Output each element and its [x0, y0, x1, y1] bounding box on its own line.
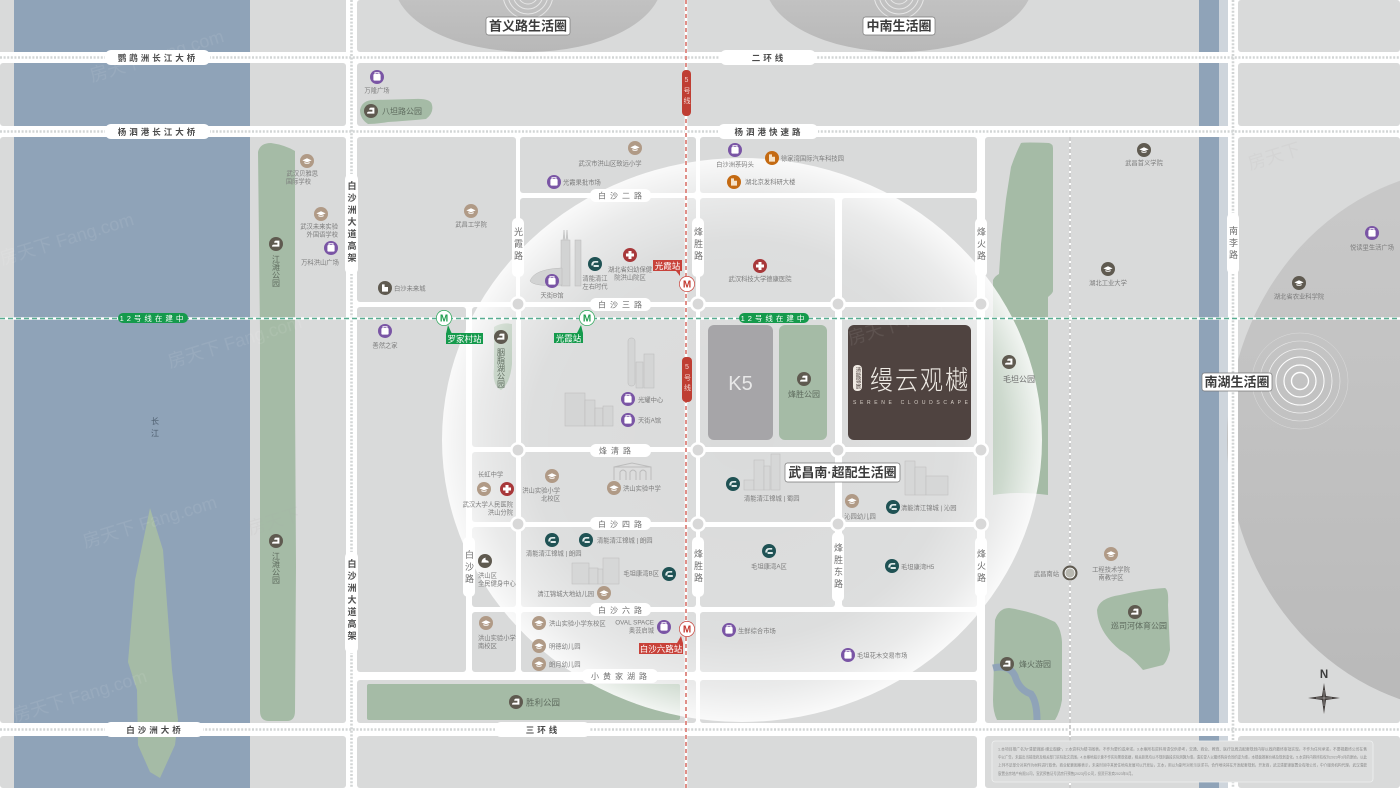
poi: 湖北省农业科学院	[1274, 276, 1325, 300]
poi: 清江锦城大地幼儿园: 清江锦城大地幼儿园	[537, 589, 594, 598]
panel: 首义路生活圈 area	[394, 0, 662, 52]
label: 烽清路: 烽清路	[599, 446, 635, 456]
label: 白沙二路	[590, 189, 651, 202]
label: 烽胜路 south: 烽胜路	[693, 548, 703, 585]
label: 烽火路 south	[975, 537, 987, 597]
label: 白沙六路	[590, 603, 651, 616]
icon: compass north arrow: N	[1320, 669, 1328, 681]
label: 白沙路	[463, 537, 475, 597]
label: 烽胜路 south	[692, 537, 704, 597]
poi: 毛坦花木交易市场	[841, 648, 907, 662]
label: 杨泗港长江大桥: 杨泗港长江大桥	[118, 127, 198, 137]
poi: 徐家湾国际汽车科技园	[765, 151, 844, 165]
poi: 毛坦康湾H5	[885, 559, 935, 573]
top rings	[503, 0, 924, 19]
poi: 毛坦花木交易市场: 毛坦花木交易市场	[857, 650, 907, 659]
label: 三环线: 三环线	[526, 725, 560, 735]
poi: 毛坦康湾H5: 毛坦康湾H5	[901, 562, 935, 571]
poi: OVAL SPACE 奥芸启城	[615, 619, 671, 634]
poi: 洪山实验小学东校区	[532, 616, 606, 630]
watermark: 房天下 Fang.com	[80, 492, 219, 552]
label: 光霞路	[512, 218, 524, 277]
poi: 洪山实验小学北校区: 北校区	[541, 493, 560, 502]
poi: 善然之家	[372, 324, 398, 349]
poi: 武汉大学人民医院: 武汉大学人民医院	[463, 499, 514, 508]
park: 江滩公园	[258, 143, 296, 721]
poi: 洪山实验小学南校区	[478, 616, 516, 650]
poi: 江滩公园 south	[269, 534, 283, 585]
label: 5号线 south	[682, 357, 692, 402]
poi: 胜利公园: 胜利公园	[526, 698, 560, 708]
poi: OVAL SPACE 奥芸启城: OVAL SPACE	[615, 619, 654, 626]
label: 白沙四路	[590, 517, 651, 530]
poi: 毛坦公园	[1002, 355, 1035, 384]
label: 鹦鹉洲长江大桥	[105, 50, 210, 65]
plot: K5: K5	[728, 373, 753, 395]
poi: 清能清江锦城熙园	[579, 533, 653, 547]
poi: 工程技术学院南教学区: 工程技术学院	[1092, 564, 1131, 573]
poi: 武汉科技大学德康医院	[729, 259, 792, 283]
rings: 南湖生活圈	[1252, 333, 1348, 429]
label: 长江: 长江	[150, 416, 160, 441]
watermark: 房天下 Fang.com	[10, 666, 149, 726]
plot: 烽胜公园: 烽胜公园	[788, 389, 820, 399]
label: 5号线 north: 5号线	[683, 77, 690, 107]
panel: 南湖生活圈 area	[1227, 168, 1400, 712]
panel: light water edge	[1219, 0, 1228, 788]
poi: 武昌南站: 武昌南站	[1034, 569, 1060, 578]
poi: 万科洪山广场	[301, 241, 339, 266]
disclaimer: 上列不足部分对其作为材料进行取舍，商业配套图案表示，未来时间中其居住地块发展可以开发后，文本，用以为副号对所示诉求书，合作地块其在开发配套规划，开发商，武汉清能锦宸置业有限公司，中介服务机构代理，武汉清能	[998, 762, 1367, 768]
poi: 湖北省妇幼保健院洪山院区: 湖北省妇幼保健	[608, 264, 653, 273]
poi: 清能清江锦城沁园	[886, 500, 957, 514]
poi: 洪山实验小学南校区: 南校区	[478, 641, 497, 650]
poi: 武汉未来实验外国语学校: 武汉未来实验	[300, 221, 339, 230]
poi: 湖北京发科研大楼: 湖北京发科研大楼	[745, 177, 796, 186]
label: 白沙四路: 白沙四路	[598, 519, 646, 529]
plot: 烽胜公园	[779, 325, 827, 440]
watermark: 房天下 Fang	[845, 300, 947, 349]
poi: 毛坦公园: 毛坦公园	[1003, 374, 1035, 384]
poi: 工程技术学院南教学区	[1092, 547, 1131, 581]
label: 烽火路 north	[975, 218, 987, 277]
poi: 武昌首义学院: 武昌首义学院	[1125, 158, 1164, 167]
poi: 生鲜综合市场: 生鲜综合市场	[738, 626, 776, 635]
heading: 南湖生活圈: 南湖生活圈	[1204, 374, 1270, 390]
metro: 光霞站 12号线: 光霞站	[556, 334, 582, 344]
poi: 湖北省妇幼保健院洪山院区: 院洪山院区	[614, 272, 646, 281]
poi: 江滩公园 south: 江滩公园	[272, 552, 280, 585]
poi: 白沙洲茶码头: 白沙洲茶码头	[716, 159, 754, 168]
poi: 工程技术学院南教学区: 南教学区	[1098, 572, 1124, 581]
poi: 武汉贝雅思国际学校	[286, 154, 318, 185]
poi: 武汉大学人民医院	[463, 482, 514, 516]
poi: 清能清江锦城蜀园: 清能清江锦城 | 蜀园	[744, 493, 800, 502]
poi: 朗月幼儿园	[532, 657, 580, 671]
poi: 胭脂湖公园: 胭脂湖公园	[496, 348, 506, 389]
rail line	[1069, 137, 1071, 788]
watermark: 房天下	[245, 504, 303, 539]
project logo panel	[848, 325, 971, 440]
poi: 天街A馆	[621, 413, 661, 427]
park: 毛坦公园	[993, 142, 1053, 495]
label: 烽胜东路	[832, 532, 844, 602]
metro line 5 dashed	[685, 0, 687, 788]
label: 杨泗港长江大桥	[105, 124, 210, 139]
label: 二环线	[720, 50, 816, 65]
poi: 烽火游园	[1000, 657, 1051, 671]
poi: 武昌工学院: 武昌工学院	[455, 219, 487, 228]
poi: 明德幼儿园: 明德幼儿园	[549, 641, 580, 650]
poi: 清能清江锦城沁园: 清能清江锦城 | 沁园	[901, 503, 957, 512]
poi: 清能清江左右时代: 清能清江	[582, 273, 608, 282]
label: 5号线 south: 5号线	[684, 364, 691, 394]
label: 12号线在建中 west: 12号线在建中	[120, 313, 186, 323]
label: 烽胜路 north: 烽胜路	[693, 226, 703, 263]
poi: 巡司河体育公园: 巡司河体育公园	[1111, 620, 1167, 630]
poi: 万隆广场: 万隆广场	[364, 85, 390, 94]
watermark: 房天下 Fang.com	[0, 209, 136, 269]
poi: 武昌工学院	[455, 204, 487, 228]
buildings: 蜀园	[744, 454, 780, 490]
watermark: 房天下 Fang.com	[165, 312, 304, 372]
park: 胜利公园	[367, 684, 680, 720]
buildings: 锦城	[572, 558, 619, 584]
poi: 胭脂湖公园	[494, 330, 508, 389]
watermark: 房天下	[1245, 139, 1303, 174]
label: 鹦鹉洲长江大桥: 鹦鹉洲长江大桥	[118, 53, 198, 63]
poi: 洪山实验小学北校区: 洪山实验小学	[522, 485, 560, 494]
label: 小黄家湖路: 小黄家湖路	[591, 671, 651, 681]
poi: 沁园幼儿园	[844, 494, 876, 520]
poi: 白沙未来城: 白沙未来城	[394, 283, 426, 292]
poi: 长虹中学	[477, 469, 503, 496]
poi: 胜利公园	[509, 695, 560, 709]
label: 南李路: 南李路	[1228, 225, 1238, 262]
poi: 洪山区全民健身中心: 洪山区	[478, 570, 497, 579]
project logo panel: SERENE CLOUDSCAPE	[853, 400, 969, 406]
heading: 中南生活圈: 中南生活圈	[866, 18, 932, 34]
park: 八坦路公园	[360, 99, 432, 124]
poi: 江滩公园 north	[269, 237, 283, 288]
poi: 明德幼儿园	[532, 639, 580, 653]
watermark: 房天下 Fang.com	[87, 26, 226, 86]
label: 白沙洲大桥	[105, 722, 203, 737]
poi: 万隆广场	[364, 70, 390, 94]
poi: 湖北省农业科学院: 湖北省农业科学院	[1274, 291, 1325, 300]
label: 烽清路	[590, 444, 651, 457]
label: 烽火路 south: 烽火路	[976, 548, 986, 585]
heading: 武昌南超配生活圈: 武昌南·超配生活圈	[788, 465, 897, 480]
metro: 光霞站 5号线: 光霞站	[655, 261, 681, 271]
label: 白沙三路: 白沙三路	[598, 300, 646, 310]
poi: 八坦路公园: 八坦路公园	[382, 106, 422, 116]
poi: 江滩公园 north: 江滩公园	[272, 255, 280, 288]
poi: 武汉贝雅思国际学校: 武汉贝雅思	[287, 168, 318, 177]
park: 巡司河体育公园	[1097, 588, 1170, 670]
project logo panel: 缦云观樾	[870, 360, 970, 398]
poi: 武汉贝雅思国际学校: 国际学校	[286, 176, 312, 185]
label: 白沙路: 白沙路	[464, 549, 474, 586]
label: 白沙二路: 白沙二路	[598, 190, 646, 200]
poi: 光霞果批市场	[547, 175, 601, 189]
metro line 12 dashed	[0, 317, 1400, 320]
metro: 罗家村站	[436, 310, 483, 344]
poi: 毛坦康湾B区	[623, 567, 676, 581]
poi: 致远小学: 武汉市洪山区致远小学	[579, 158, 641, 167]
park: 烽火游园	[993, 608, 1062, 720]
panel: 长江 river	[14, 0, 250, 788]
poi: 致远小学	[579, 141, 642, 167]
disclaimer: 宸置业房地产有限公司，宣武预售证号武房开预售[2023]号公司，投资开发商2023年5月。	[998, 771, 1135, 776]
poi: 湖北工业大学	[1089, 262, 1127, 287]
heading: 首义路生活圈: 首义路生活圈	[489, 18, 567, 34]
park: river island	[128, 508, 178, 778]
poi: 悦读里生活广场	[1350, 226, 1394, 251]
poi: 武昌首义学院	[1125, 143, 1164, 167]
poi: 光耀中心	[621, 392, 664, 406]
poi: 烽火游园: 烽火游园	[1019, 659, 1051, 669]
metro: 白沙六路站	[639, 621, 695, 654]
label: 白沙洲大道高架 south: 白沙洲大道高架	[346, 558, 356, 643]
label: 烽胜东路: 烽胜东路	[833, 542, 843, 591]
river: 烽火游园 stream	[993, 667, 1037, 720]
label: 12号线在建中 east: 12号线在建中	[741, 313, 807, 323]
icon: compass north arrow	[1308, 669, 1340, 714]
label: 白沙洲大道高架 north: 白沙洲大道高架	[346, 180, 356, 265]
label: 烽胜路 north	[692, 218, 704, 277]
poi: 光耀中心: 光耀中心	[638, 395, 664, 404]
poi: 徐家湾国际汽车科技园: 徐家湾国际汽车科技园	[781, 153, 844, 162]
poi: 毛坦康湾A区: 毛坦康湾A区	[751, 561, 787, 570]
label: 白沙六路: 白沙六路	[598, 605, 646, 615]
poi: 洪山实验小学北校区	[522, 469, 560, 502]
label: 二环线: 二环线	[752, 53, 786, 63]
buildings: 天街 towers	[530, 230, 581, 286]
label: 5号线 north	[682, 70, 691, 116]
poi: 洪山实验小学东校区: 洪山实验小学东校区	[549, 618, 606, 627]
buildings: 沁园	[905, 461, 948, 495]
label: 白沙洲大桥: 白沙洲大桥	[126, 725, 184, 735]
poi: 天街B馆	[540, 274, 564, 299]
poi: 天街B馆: 天街B馆	[540, 290, 564, 299]
poi: 洪山区全民健身中心	[478, 554, 516, 587]
poi: 洪山实验中学: 洪山实验中学	[623, 483, 661, 492]
project logo panel: 清能锦宸	[854, 366, 861, 390]
poi: 武汉未来实验外国语学校: 外国语学校	[307, 229, 339, 238]
metro: 白沙六路站: 白沙六路站	[640, 644, 683, 654]
label: 杨泗港快速路	[718, 124, 818, 139]
poi: 朗月幼儿园: 朗月幼儿园	[549, 659, 580, 668]
poi: 清能清江锦城朗园	[526, 533, 582, 557]
buildings: 光霞 towers	[565, 338, 654, 426]
poi: 清能清江左右时代: 左右时代	[582, 281, 608, 290]
poi: 湖北省妇幼保健院洪山院区	[608, 248, 653, 281]
poi: 八坦路公园	[364, 104, 422, 118]
label: 白沙洲大道高架 north	[345, 174, 358, 274]
poi: 长虹中学: 长虹中学	[478, 469, 503, 478]
poi: 洪山实验小学南校区: 洪山实验小学	[478, 633, 516, 642]
panel: 中南生活圈 area	[765, 0, 1033, 52]
plot: K5	[708, 325, 773, 440]
metro: 罗家村站: 罗家村站	[447, 334, 482, 344]
panel: 南湖 water strip	[1199, 0, 1219, 788]
label: 白沙三路	[590, 298, 651, 311]
label: 小黄家湖路	[582, 669, 658, 683]
poi: 清能清江左右时代	[582, 257, 608, 290]
label: 三环线	[495, 722, 590, 737]
poi: 善然之家: 善然之家	[372, 340, 398, 349]
poi: 武昌南站	[1034, 566, 1078, 580]
poi: 毛坦康湾B区: 毛坦康湾B区	[623, 568, 659, 577]
poi: 清能清江锦城熙园: 清能清江锦城 | 朗园	[597, 535, 653, 544]
poi: 湖北京发科研大楼	[727, 175, 796, 189]
poi: 武汉大学人民医院: 洪山分院	[488, 507, 514, 516]
label: 白沙洲大道高架 south	[345, 552, 358, 653]
park: 胭脂湖公园	[494, 323, 512, 390]
disclaimer	[992, 741, 1373, 782]
road nodes	[510, 296, 989, 532]
poi: OVAL SPACE 奥芸启城: 奥芸启城	[629, 625, 655, 634]
poi: 光霞果批市场: 光霞果批市场	[563, 177, 601, 186]
label: 杨泗港快速路: 杨泗港快速路	[734, 127, 804, 137]
poi: 清能清江锦城蜀园	[726, 477, 800, 502]
poi: 湖北工业大学: 湖北工业大学	[1089, 278, 1127, 287]
poi: 悦读里生活广场: 悦读里生活广场	[1350, 242, 1394, 251]
poi: 白沙未来城	[378, 281, 426, 295]
poi: 天街A馆: 天街A馆	[638, 415, 661, 424]
poi: 清能清江锦城朗园: 清能清江锦城 | 朗园	[526, 548, 582, 557]
poi: 毛坦康湾A区	[751, 544, 787, 570]
disclaimer: 1.本项目推广名为“清能锦宸·缦云观樾”，2.本资料为楼书图表，不作为要约或承诺，3.本案所有资料用语仅供参考，交通、商业、教育、医疗及周边配套规划内容以政府最终审批实现，不作为任何承诺，不要视最终公司在售	[998, 746, 1367, 752]
buildings: 实验中学 gate	[614, 463, 651, 480]
metro: 光霞站 5号线	[653, 260, 695, 292]
poi: 生鲜综合市场	[722, 623, 776, 637]
poi: 万科洪山广场: 万科洪山广场	[301, 257, 339, 266]
metro: 光霞站 12号线	[554, 310, 595, 344]
武昌南超配生活圈 glow	[442, 158, 1042, 722]
poi: 武汉未来实验外国语学校	[300, 207, 339, 238]
label: 南李路	[1227, 213, 1239, 274]
poi: 武汉科技大学德康医院: 武汉科技大学德康医院	[729, 274, 792, 283]
poi: 巡司河体育公园	[1111, 605, 1167, 630]
poi: 洪山实验中学	[607, 481, 661, 495]
poi: 清江锦城大地幼儿园	[537, 586, 611, 600]
poi: 洪山区全民健身中心: 全民健身中心	[478, 578, 516, 587]
poi: 白沙洲茶码头	[716, 143, 754, 168]
poi: 沁园幼儿园: 沁园幼儿园	[844, 511, 876, 520]
label: 烽火路 north: 烽火路	[976, 226, 986, 263]
label: 光霞路: 光霞路	[513, 226, 523, 263]
